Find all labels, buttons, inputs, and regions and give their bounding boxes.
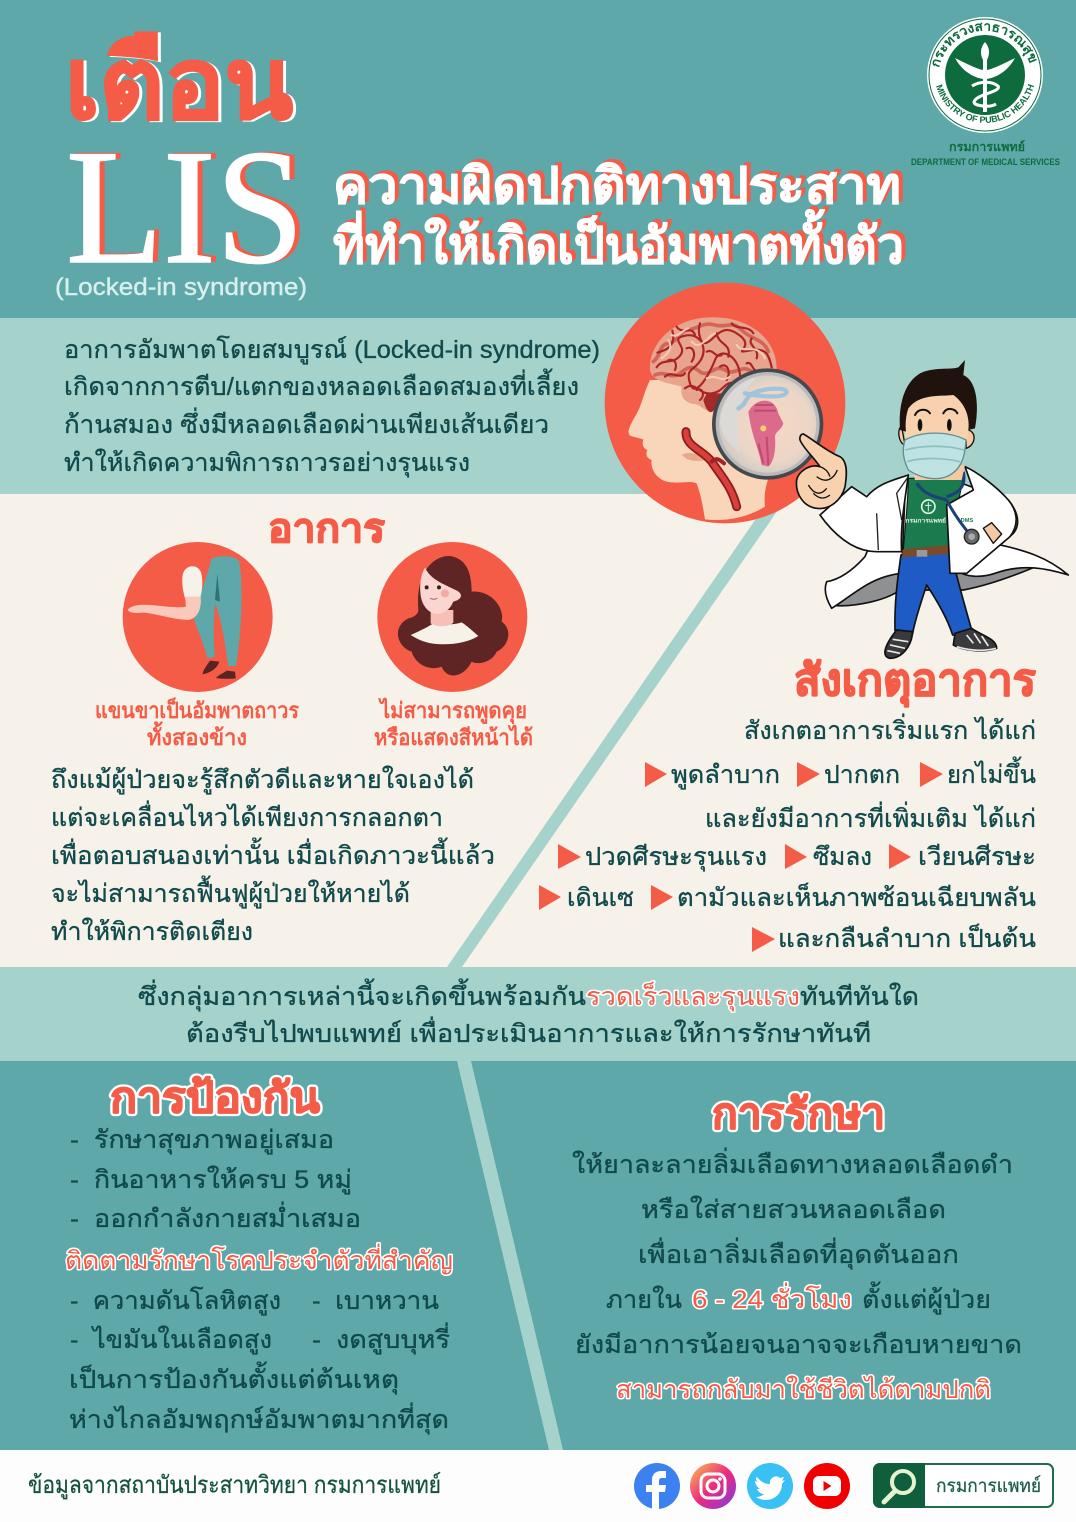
face <box>905 393 969 473</box>
illustration: doctor character: กรมการแพทย์ <box>905 516 946 524</box>
treatment text: ยังมีอาการน้อยจนอาจจะเกือบหายขาด <box>575 1331 1022 1359</box>
observation list <box>539 713 1036 953</box>
symptoms paragraph: แต่จะเคลื่อนไหวได้เพียงการกลอกตา <box>51 800 443 832</box>
shoes <box>203 661 236 679</box>
neck <box>431 610 453 626</box>
cerebellum <box>703 393 723 412</box>
summary band text: รวดเร็วและรุนแรง <box>586 981 800 1012</box>
hair <box>900 360 977 432</box>
stethoscope <box>917 472 972 537</box>
shirt emblem <box>922 500 935 513</box>
trousers <box>193 556 242 666</box>
observation list: เดินเซ <box>567 884 634 912</box>
symptom label left: แขนขาเป็นอัมพาตถาวร <box>95 696 299 723</box>
surgical mask <box>903 433 966 479</box>
prevention list: - กินอาหารให้ครบ 5 หมู่ <box>70 1165 352 1195</box>
prevention list: เป็นการป้องกันตั้งแต่ต้นเหตุ <box>69 1361 399 1395</box>
logo text: department: DEPARTMENT OF MEDICAL SERVICES <box>911 157 1060 167</box>
observation list: และกลืนลำบาก เป็นต้น <box>778 923 1036 953</box>
prevention list: - รักษาสุขภาพอยู่เสมอ <box>70 1126 334 1155</box>
heading: prevention: การป้องกัน <box>110 1074 320 1121</box>
intro paragraph: อาการอัมพาตโดยสมบูรณ์ (Locked-in syndrome) <box>64 335 600 365</box>
observation list: และยังมีอาการที่เพิ่มเติม ได้แก่ <box>705 801 1036 833</box>
title: Locked-in syndrome: (Locked-in syndrome) <box>55 274 307 301</box>
eyes and brows <box>915 409 957 415</box>
subtitle line 1: ความผิดปกติทางประสาท <box>337 155 905 211</box>
intro paragraph: ก้านสมอง ซึ่งมีหลอดเลือดผ่านเพียงเส้นเดียว <box>64 407 549 439</box>
diagonal divider lower <box>457 1061 563 1450</box>
observation list: ปวดศีรษะรุนแรง <box>585 843 767 872</box>
treatment text: ให้ยาละลายลิ่มเลือดทางหลอดเลือดดำ <box>572 1147 1013 1179</box>
prevention list: - ความดันโลหิตสูง <box>70 1286 281 1316</box>
intro paragraph <box>64 335 600 478</box>
illustration: brain in head with magnifier <box>605 283 845 523</box>
blue ventricle swirl <box>738 389 787 408</box>
artery <box>686 432 737 507</box>
treatment text: ภายใน <box>606 1285 682 1314</box>
search box <box>873 1463 1053 1508</box>
observation list: ปากตก <box>824 761 900 789</box>
observation list: พูดลำบาก <box>671 761 780 790</box>
coat right tail <box>948 480 1068 576</box>
prevention list <box>65 1126 453 1435</box>
prevention list: - เบาหวาน <box>312 1287 439 1315</box>
summary band text: ซึ่งกลุ่มอาการเหล่านี้จะเกิดขึ้นพร้อมกัน <box>138 978 586 1012</box>
brain outer shadow wrinkles <box>653 324 768 376</box>
treatment text <box>572 1147 1022 1404</box>
coat right front <box>947 467 1016 573</box>
symptom label right: ไม่สามารถพูดคุย <box>378 697 527 725</box>
treatment text: สามารถกลับมาใช้ชีวิตได้ตามปกติ <box>616 1375 991 1404</box>
subtitle line 2: ที่ทำให้เกิดเป็นอัมพาตทั้งตัว <box>333 209 904 274</box>
light intro band <box>0 318 1076 494</box>
heading: treatment: การรักษา <box>712 1090 885 1137</box>
icon: youtube <box>804 1463 850 1509</box>
symptoms paragraph: ทำให้พิการติดเตียง <box>51 917 253 946</box>
symptom label right <box>374 697 533 750</box>
diagonal divider upper <box>447 510 778 967</box>
footer background <box>0 1450 1076 1522</box>
title: warning word: เตือน <box>65 28 293 140</box>
observation list: ซึมลง <box>813 843 872 871</box>
observation list: สังเกตอาการเริ่มแรก ได้แก่ <box>744 713 1036 745</box>
search box: กรมการแพทย์ <box>936 1475 1041 1497</box>
head profile <box>629 380 780 520</box>
heading: observe symptoms: สังเกตุอาการ <box>794 656 1036 708</box>
icon: woman unable to speak <box>377 542 527 692</box>
heading: treatment: การรักษา <box>712 1090 885 1137</box>
footer source text: ข้อมูลจากสถาบันประสาทวิทยา กรมการแพทย์ <box>28 1471 441 1500</box>
brain wrinkles <box>657 323 772 400</box>
hair back <box>398 556 508 676</box>
subtitle line 1: ความผิดปกติทางประสาท <box>333 158 901 214</box>
icon: paralysed limbs <box>123 542 273 692</box>
treatment text: 6 - 24 ชั่วโมง <box>692 1282 852 1314</box>
intro paragraph: เกิดจากการตีบ/แตกของหลอดเลือดสมองที่เลี้ยง <box>64 368 579 401</box>
summary band text: ต้องรีบไปพบแพทย์ เพื่อประเมินอาการและให้การรักษาทันที <box>186 1016 871 1048</box>
intro paragraph: ทำให้เกิดความพิการถาวรอย่างรุนแรง <box>64 448 470 478</box>
brain mass <box>650 317 777 411</box>
sleeve <box>182 566 202 598</box>
title: LIS: LIS <box>66 117 304 298</box>
coat left front <box>820 475 908 552</box>
logo text: department: กรมการแพทย์ <box>949 140 1025 154</box>
observation list: ตามัวและเห็นภาพซ้อนเฉียบพลัน <box>677 882 1036 912</box>
right hand on hip <box>983 523 1002 543</box>
left shoe <box>885 630 913 658</box>
icon: twitter <box>747 1463 793 1509</box>
arrow markers <box>539 762 943 952</box>
treatment text: ตั้งแต่ผู้ป่วย <box>862 1281 991 1315</box>
prevention list: - ออกกำลังกายสม่ำเสมอ <box>70 1201 361 1233</box>
treatment text: หรือใส่สายสวนหลอดเลือด <box>641 1195 946 1224</box>
summary band text <box>138 978 919 1048</box>
icon: facebook <box>634 1463 680 1509</box>
cream symptoms background <box>0 494 1076 967</box>
arm <box>128 597 201 620</box>
treatment text: เพื่อเอาลิ่มเลือดที่อุดตันออก <box>638 1237 959 1270</box>
pointing hand <box>796 434 846 509</box>
logo: ministry of public health seal: กระทรวงสาธารณสุข <box>932 22 1037 68</box>
symptoms paragraph: ถึงแม้ผู้ป่วยจะรู้สึกตัวดีและหายใจเองได้ <box>51 765 474 795</box>
brain highlight folds <box>662 328 770 382</box>
red circle <box>605 283 845 523</box>
illustration: doctor character <box>796 360 1068 658</box>
logo: ministry of public health seal <box>927 17 1043 133</box>
neck and ears <box>912 465 965 480</box>
cape grey <box>830 543 1043 606</box>
logo: ministry of public health seal: MINISTRY OF PUBLIC HEALTH <box>936 84 1034 123</box>
light summary band <box>0 967 1076 1061</box>
prevention list: - ไขมันในเลือดสูง <box>70 1325 272 1355</box>
title: warning word: เตือน <box>68 29 296 141</box>
symptom label left: ทั้งสองข้าง <box>147 721 247 750</box>
heading: prevention: การป้องกัน <box>110 1074 320 1121</box>
heading: symptoms: อาการ <box>268 507 386 551</box>
chest <box>411 622 478 644</box>
illustration: doctor character: DMS <box>961 518 973 524</box>
logo text: department <box>911 140 1060 167</box>
shirt <box>903 477 963 552</box>
symptom label left <box>95 696 299 750</box>
symptom label right: หรือแสดงสีหน้าได้ <box>374 724 533 750</box>
coat left tail <box>825 493 905 608</box>
summary band text: ทันทีทันใด <box>800 982 919 1011</box>
right shoe <box>953 628 997 651</box>
top teal header background <box>0 0 1076 318</box>
title: LIS: LIS <box>71 116 309 297</box>
observation list: ยกไม่ขึ้น <box>947 756 1036 789</box>
lower teal background <box>0 1061 1076 1450</box>
prevention list: - งดสูบบุหรี่ <box>312 1322 450 1355</box>
symptoms paragraph: จะไม่สามารถฟื้นฟูผู้ป่วยให้หายได้ <box>51 875 410 909</box>
ear shadow <box>682 452 707 461</box>
prevention list: ติดตามรักษาโรคประจำตัวที่สำคัญ <box>65 1243 453 1275</box>
brainstem <box>748 401 783 467</box>
trousers <box>895 552 973 635</box>
face <box>420 567 461 614</box>
symptoms paragraph: เพื่อตอบสนองเท่านั้น เมื่อเกิดภาวะนี้แล้ว <box>51 837 495 870</box>
belt <box>902 545 950 557</box>
subtitle line 2: ที่ทำให้เกิดเป็นอัมพาตทั้งตัว <box>337 206 908 271</box>
symptoms paragraph <box>51 765 495 946</box>
observation list: เวียนศีรษะ <box>918 843 1036 871</box>
prevention list: ห่างไกลอัมพฤกษ์อัมพาตมากที่สุด <box>69 1402 449 1435</box>
